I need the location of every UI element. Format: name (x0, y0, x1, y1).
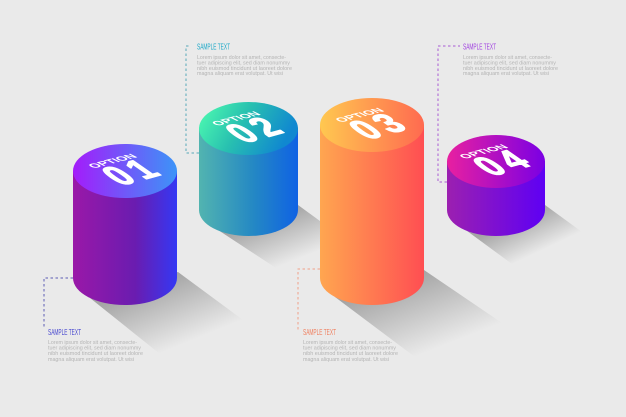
text block: option 1: SAMPLE TEXT (48, 328, 81, 337)
text block: option 4: Lorem ipsum dolor sit amet, consecte- (463, 55, 552, 61)
text block: option 4 (463, 42, 558, 77)
label: option 1: OPTION (85, 153, 141, 170)
text block: option 2: Lorem ipsum dolor sit amet, consecte- (197, 55, 286, 61)
label: option 2: OPTION (209, 110, 264, 127)
text block: option 2: magna aliquam erat volutpat. Ut wisi (197, 71, 283, 77)
text block: option 3: nibh euismod tincidunt ut laoreet dolore (303, 351, 398, 357)
text block: option 2 (197, 42, 292, 77)
connector: option 2 (186, 46, 199, 153)
text block: option 3: tuer adipiscing elit, sed diam nonummy (303, 346, 396, 352)
text block: option 2: SAMPLE TEXT (197, 42, 230, 52)
text block: option 1: Lorem ipsum dolor sit amet, consecte- (48, 340, 137, 346)
text block: option 2: tuer adipiscing elit, sed diam nonummy (197, 60, 290, 66)
cylinder: option 1 (73, 144, 177, 305)
text block: option 3 (303, 328, 398, 363)
text block: option 4: SAMPLE TEXT (463, 42, 496, 52)
text block: option 3: magna aliquam erat volutpat. Ut wisi (303, 357, 389, 363)
cylinder: option 3 (320, 98, 424, 305)
number: 01: 01 (90, 152, 175, 191)
text block: option 2: nibh euismod tincidunt ut laoreet dolore (197, 66, 292, 72)
shadow: cylinder 1 (90, 272, 243, 354)
text block: option 1 (48, 328, 143, 363)
text block: option 1: nibh euismod tincidunt ut laoreet dolore (48, 351, 143, 357)
number: 03: 03 (337, 106, 422, 145)
label: option 4: OPTION (456, 143, 512, 160)
shadow: cylinder 3 (335, 270, 502, 357)
number: 04: 04 (461, 143, 546, 182)
text block: option 4: nibh euismod tincidunt ut laoreet dolore (463, 66, 558, 72)
number: 02: 02 (214, 110, 298, 149)
connector: option 3 (298, 269, 320, 331)
text block: option 1: magna aliquam erat volutpat. Ut wisi (48, 357, 134, 363)
connector: option 4 (438, 46, 460, 182)
shadow: cylinder 2 (215, 205, 346, 268)
label: option 3: OPTION (332, 107, 388, 124)
shadow: cylinder 4 (463, 205, 582, 264)
cylinder: option 2 (199, 102, 298, 236)
cylinder: option 4 (447, 135, 546, 236)
connector: option 1 (44, 278, 73, 329)
text block: option 4: tuer adipiscing elit, sed diam nonummy (463, 60, 556, 66)
text block: option 3: Lorem ipsum dolor sit amet, consecte- (303, 340, 392, 346)
text block: option 1: tuer adipiscing elit, sed diam nonummy (48, 346, 141, 352)
text block: option 4: magna aliquam erat volutpat. Ut wisi (463, 71, 549, 77)
text block: option 3: SAMPLE TEXT (303, 328, 336, 337)
